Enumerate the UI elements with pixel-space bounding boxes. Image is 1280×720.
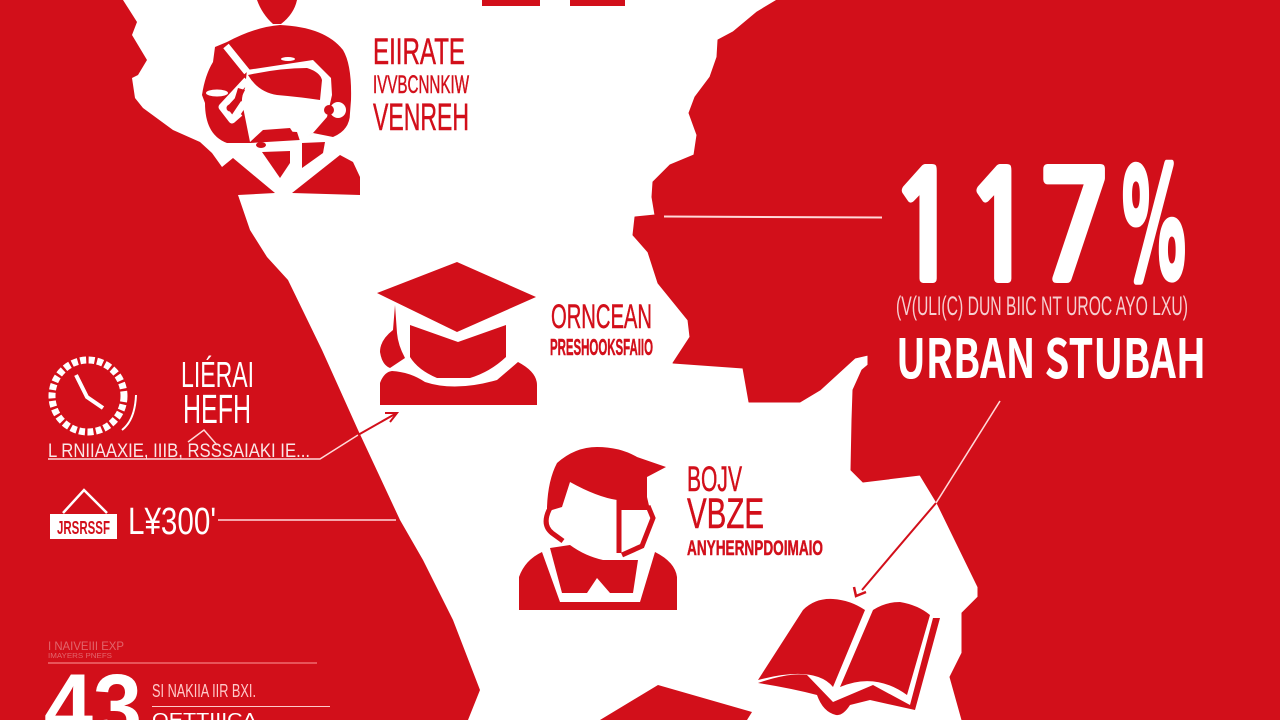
arrow: statistic to book [854,401,1000,596]
text block: clock label: HEFH [183,386,251,432]
text block: top label: VENREH [373,97,469,139]
connector line from sign value [218,519,396,521]
text block: student label [687,460,823,560]
icon fragment: bottom centre shape [600,685,752,720]
icon: student bust [519,447,677,610]
text block: student label: BOJV [687,460,742,499]
text block: top label: IVVBCNNKIW [373,71,469,99]
text block: student label: ANYHERNPDOIMAIO [687,537,823,560]
text block: graduate label [550,298,653,360]
icon: hanging sign: JRSRSSF [57,518,110,538]
text block: student label: VBZE [687,490,764,538]
icon: clock [52,360,136,432]
text block: graduate label: ORNCEAN [551,298,652,336]
text block: faint note [48,639,124,660]
text block: bottom caption [152,681,330,720]
text block: top label [373,31,469,139]
top icon fragments [257,0,625,24]
icon: open book [758,599,940,715]
text block: clock label [48,354,310,462]
panel: left red region [0,0,480,720]
text block: top label: EIIRATE [373,31,465,72]
icon: hanging sign [50,490,117,539]
big statistic: 117%: 117 [888,155,1112,303]
text block: faint note: I NAIVEIII EXP [48,639,124,653]
panel: right red region [633,0,1280,720]
icon: person with glasses [202,25,360,195]
icon sub-element: collar and shoulders [256,128,360,195]
infographic canvas: % [1116,155,1192,303]
text: sign value: L¥300' [128,501,216,543]
connector line to statistic [664,216,882,218]
text block: faint note: IMAYERS PNEFS [48,653,112,660]
text block: bottom caption: SI NAKIIA IIR BXI. [152,681,256,701]
infographic canvas: PRESHOOKSFAIIO [550,334,653,360]
arrow: label to graduate [48,413,397,459]
text block: clock label: L RNIIAAXIE, IIIB, RSSSAIAKI IE... [48,441,310,462]
text block: clock label: LIÉRAI [181,354,254,395]
icon: graduate in cap [377,262,537,405]
